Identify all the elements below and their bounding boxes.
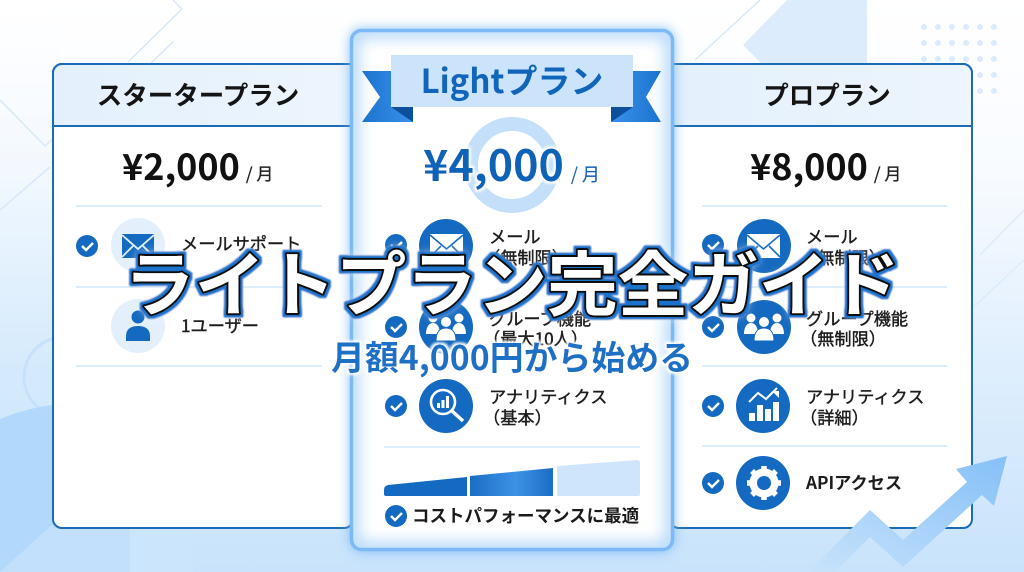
feature: detailed analytics: （詳細）	[800, 404, 869, 429]
feature: email unlimited	[385, 219, 569, 273]
feature: basic analytics: （基本）	[483, 404, 552, 429]
feature: group up to 10: グループ機能	[489, 305, 591, 330]
feature: email unlimited: メール	[489, 223, 541, 248]
arrow: growth	[808, 456, 1007, 572]
panel: light plan	[350, 29, 674, 551]
panel: pro plan	[670, 64, 972, 528]
feature: group unlimited: グループ機能	[806, 305, 908, 330]
ribbon	[362, 55, 661, 122]
cost performance bars	[384, 460, 640, 496]
plan name: pro: プロプラン	[763, 76, 891, 112]
panel header: starter	[53, 64, 353, 126]
feature: basic analytics: アナリティクス	[489, 383, 607, 408]
feature: detailed analytics	[702, 379, 924, 433]
price: light: ¥4,000 / 月	[423, 132, 600, 194]
subtitle: 月額4,000円から始める	[331, 331, 693, 380]
feature: group unlimited	[702, 300, 908, 354]
feature: email unlimited	[702, 219, 886, 273]
price: pro: ¥8,000 / 月	[750, 139, 901, 191]
panel header: pro	[670, 64, 972, 126]
feature: email unlimited: （無制限）	[483, 244, 569, 269]
cost performance label: コストパフォーマンスに最適	[412, 503, 640, 528]
feature: group up to 10: （最大10人）	[483, 325, 588, 350]
title: ライトプラン完全ガイド	[124, 229, 900, 331]
feature: group unlimited: （無制限）	[800, 325, 886, 350]
decorative ring	[471, 124, 553, 206]
feature: basic analytics	[385, 379, 607, 433]
feature: email unlimited: メール	[806, 223, 858, 248]
feature: group up to 10	[385, 300, 591, 354]
plan name: starter: スタータープラン	[97, 76, 299, 112]
feature: one user: 1ユーザー	[181, 312, 259, 337]
feature: detailed analytics: アナリティクス	[806, 383, 924, 408]
feature: API access: APIアクセス	[805, 469, 902, 494]
feature: email unlimited: （無制限）	[800, 244, 886, 269]
feature: one user	[111, 299, 259, 353]
plan name: light: Lightプラン	[421, 55, 603, 103]
price: starter: ¥2,000 / 月	[122, 139, 273, 191]
feature: email support: メールサポート	[181, 230, 301, 255]
panel: starter plan	[53, 64, 353, 528]
feature: email support	[76, 218, 301, 272]
feature: API access	[702, 456, 902, 510]
